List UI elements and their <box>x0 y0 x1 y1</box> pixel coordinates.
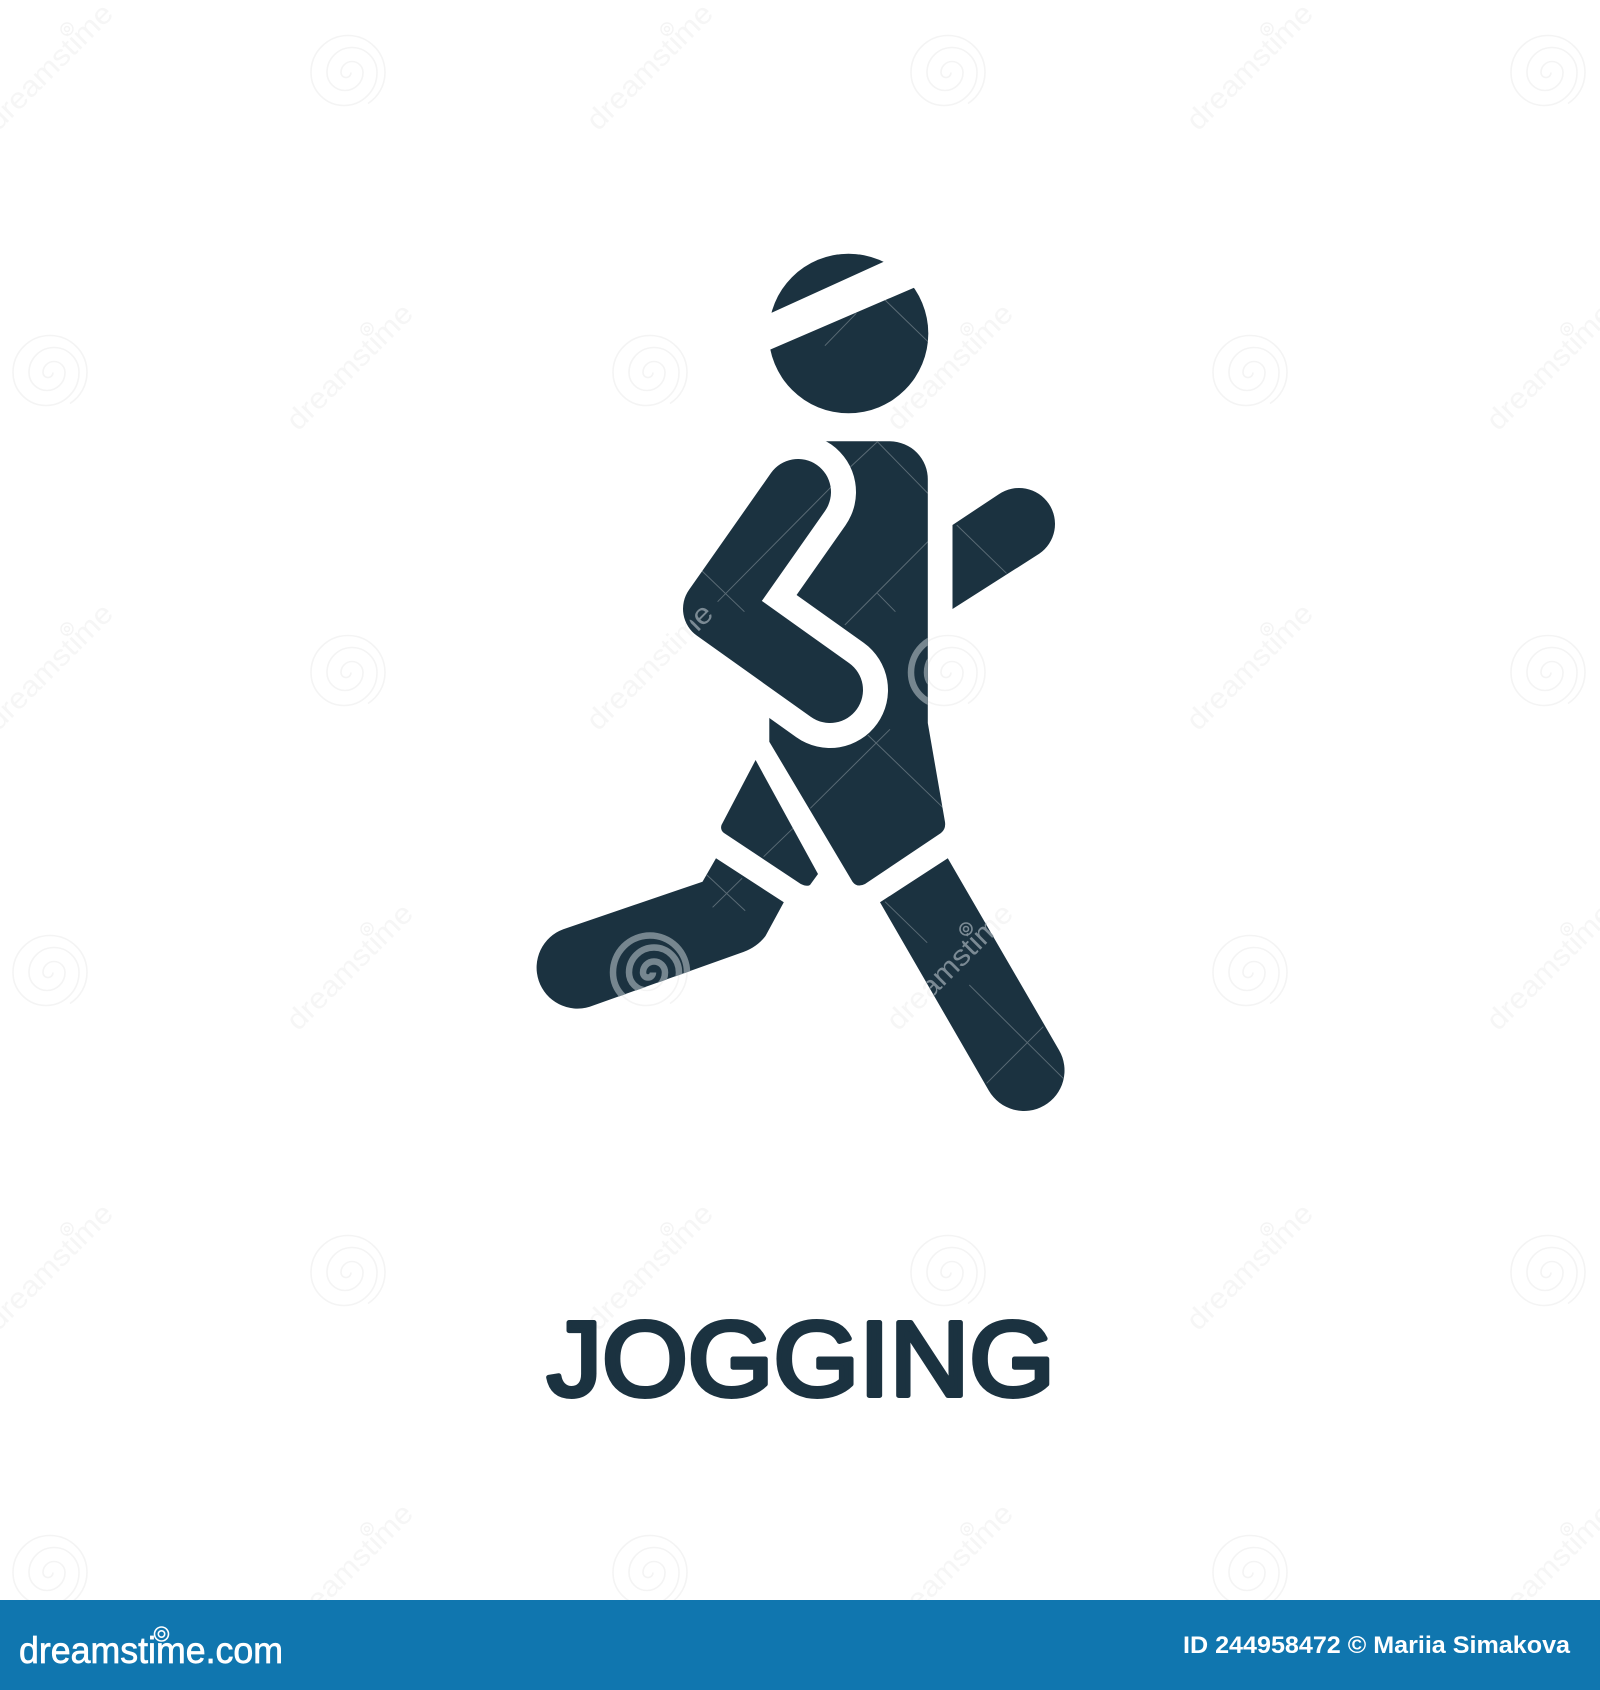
watermark text: dreamstime <box>280 297 420 437</box>
watermark text: dreamstime <box>880 897 1020 1037</box>
watermark overlay on figure: dreamstime <box>880 897 1020 1037</box>
torso <box>769 441 945 886</box>
image id and author credit: ID 244958472 © Mariia Simakova <box>1183 1632 1571 1659</box>
watermark text: dreamstime <box>880 297 1020 437</box>
watermark overlay on figure: dreamstime <box>580 597 720 737</box>
watermark text: dreamstime <box>1180 597 1320 737</box>
icon: jogging figure <box>537 240 1065 1111</box>
watermark text: dreamstime <box>280 1497 420 1637</box>
watermark text: dreamstime <box>1180 0 1320 137</box>
near arm <box>580 492 830 737</box>
far arm <box>952 488 1055 609</box>
watermark text: dreamstime <box>1180 1197 1320 1337</box>
watermark text: dreamstime <box>880 1497 1020 1637</box>
near arm: dreamstime <box>580 597 720 737</box>
icon: logo spiral <box>154 1627 168 1641</box>
rear thigh <box>721 760 818 886</box>
logo text: dreamstime.com <box>19 1630 283 1671</box>
rear lower leg <box>537 858 784 1009</box>
footer band <box>0 1600 1600 1690</box>
title: JOGGING: JOGGING <box>547 1300 1055 1418</box>
watermark text: dreamstime <box>580 1197 720 1337</box>
watermark text: dreamstime <box>580 0 720 137</box>
head with headband <box>760 240 930 413</box>
front leg <box>880 858 1065 1111</box>
watermark overlay on figure <box>580 300 1063 1083</box>
watermark text: dreamstime <box>280 897 420 1037</box>
